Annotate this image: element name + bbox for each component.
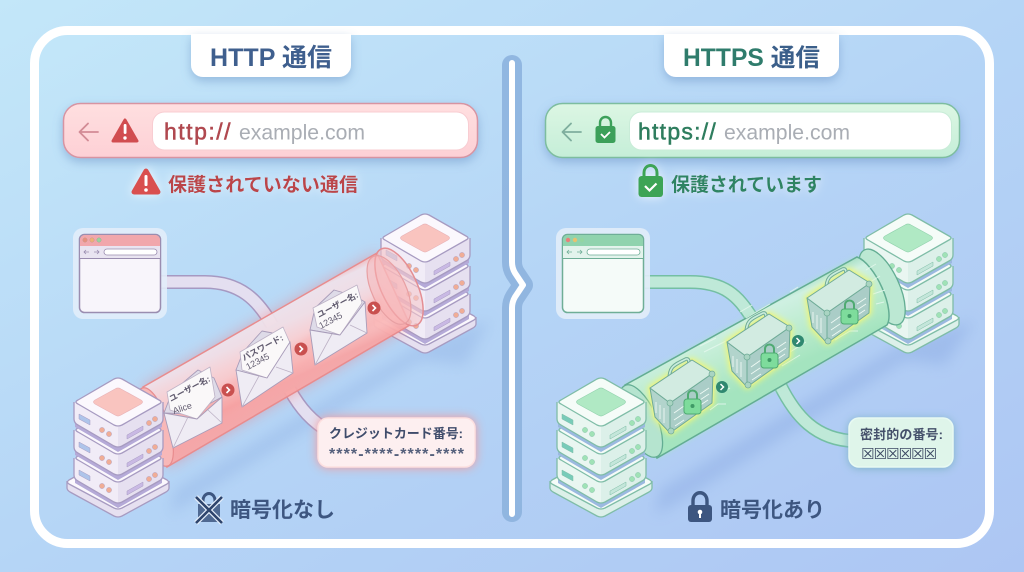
envelope 1: ユーザー名: (167, 374, 212, 404)
heading tab: HTTP 通信: HTTP 通信 (210, 44, 332, 72)
status: encrypted (688, 493, 825, 522)
browser window (556, 228, 650, 319)
url text: example.com (239, 122, 365, 144)
envelope 2: 12345 (244, 351, 271, 372)
illustration: client to server connection over encrypted tube (550, 214, 975, 517)
envelope 1: Alice (172, 400, 193, 416)
flow arrows (716, 335, 804, 393)
status: no encryption: 暗号化なし (230, 499, 335, 522)
briefcase 1 (650, 359, 715, 434)
secure message (638, 166, 822, 197)
icon: padlock (596, 117, 616, 143)
envelope 2: パスワード: (240, 333, 285, 363)
secure message: 保護されています (671, 174, 822, 196)
envelope 1 (164, 367, 222, 448)
browser window (73, 228, 167, 319)
tube mouth (365, 241, 433, 333)
right server (857, 214, 959, 353)
heading tab: HTTPS 通信: HTTPS 通信 (683, 44, 820, 72)
status: encrypted: 暗号化あり (720, 499, 825, 522)
icon: warning triangle (113, 120, 137, 141)
tube left mouth (129, 384, 181, 470)
tube glow (143, 253, 410, 467)
data callout: card number (318, 418, 475, 467)
cable (645, 282, 855, 441)
floor shadow (170, 320, 490, 515)
cable (160, 282, 330, 432)
data callout: sealed number (849, 418, 953, 467)
icon: back arrow (562, 124, 581, 140)
envelope 3 (310, 285, 367, 365)
panel: HTTPS (546, 34, 975, 522)
panel: HTTP (64, 34, 490, 523)
address bar: http (64, 104, 478, 158)
heading tab: HTTP 通信 (191, 34, 351, 77)
floor shadow (655, 320, 975, 515)
tube (129, 241, 433, 470)
envelope 3: 12345 (317, 310, 344, 331)
client-end collar (611, 379, 671, 463)
url field (630, 112, 952, 150)
briefcase 3 (807, 269, 872, 344)
icon: back arrow (80, 124, 98, 140)
url field (152, 112, 468, 150)
left server (550, 378, 652, 517)
url text: example.com (724, 122, 850, 144)
tube glow (625, 257, 887, 458)
data callout: card number: クレジットカード番号: (329, 426, 463, 441)
data callout: sealed number: ☒☒☒☒☒☒ (861, 445, 937, 463)
url text: https:// (638, 118, 717, 144)
right server (374, 214, 476, 353)
heading tab: HTTPS 通信 (664, 34, 839, 77)
warning message: 保護されていない通信 (168, 174, 358, 196)
icon: padlock (688, 493, 712, 522)
icon: crossed-out lock (196, 494, 222, 523)
circuit traces (700, 264, 885, 410)
tube (611, 257, 889, 463)
server-end collar (849, 243, 915, 331)
envelope 2 (236, 327, 293, 407)
briefcase 2 (727, 313, 792, 388)
data callout: card number: ****-****-****-**** (329, 446, 465, 463)
illustration: client to server connection over plain tube (67, 214, 490, 517)
url text: http:// (164, 118, 232, 144)
data callout: sealed number: 密封的の番号: (860, 427, 943, 442)
envelope 3: ユーザー名: (315, 290, 360, 320)
address bar: https (546, 104, 960, 158)
left server (67, 378, 169, 517)
flow arrows (222, 302, 380, 396)
status: no encryption (196, 494, 335, 523)
center divider (512, 63, 523, 514)
